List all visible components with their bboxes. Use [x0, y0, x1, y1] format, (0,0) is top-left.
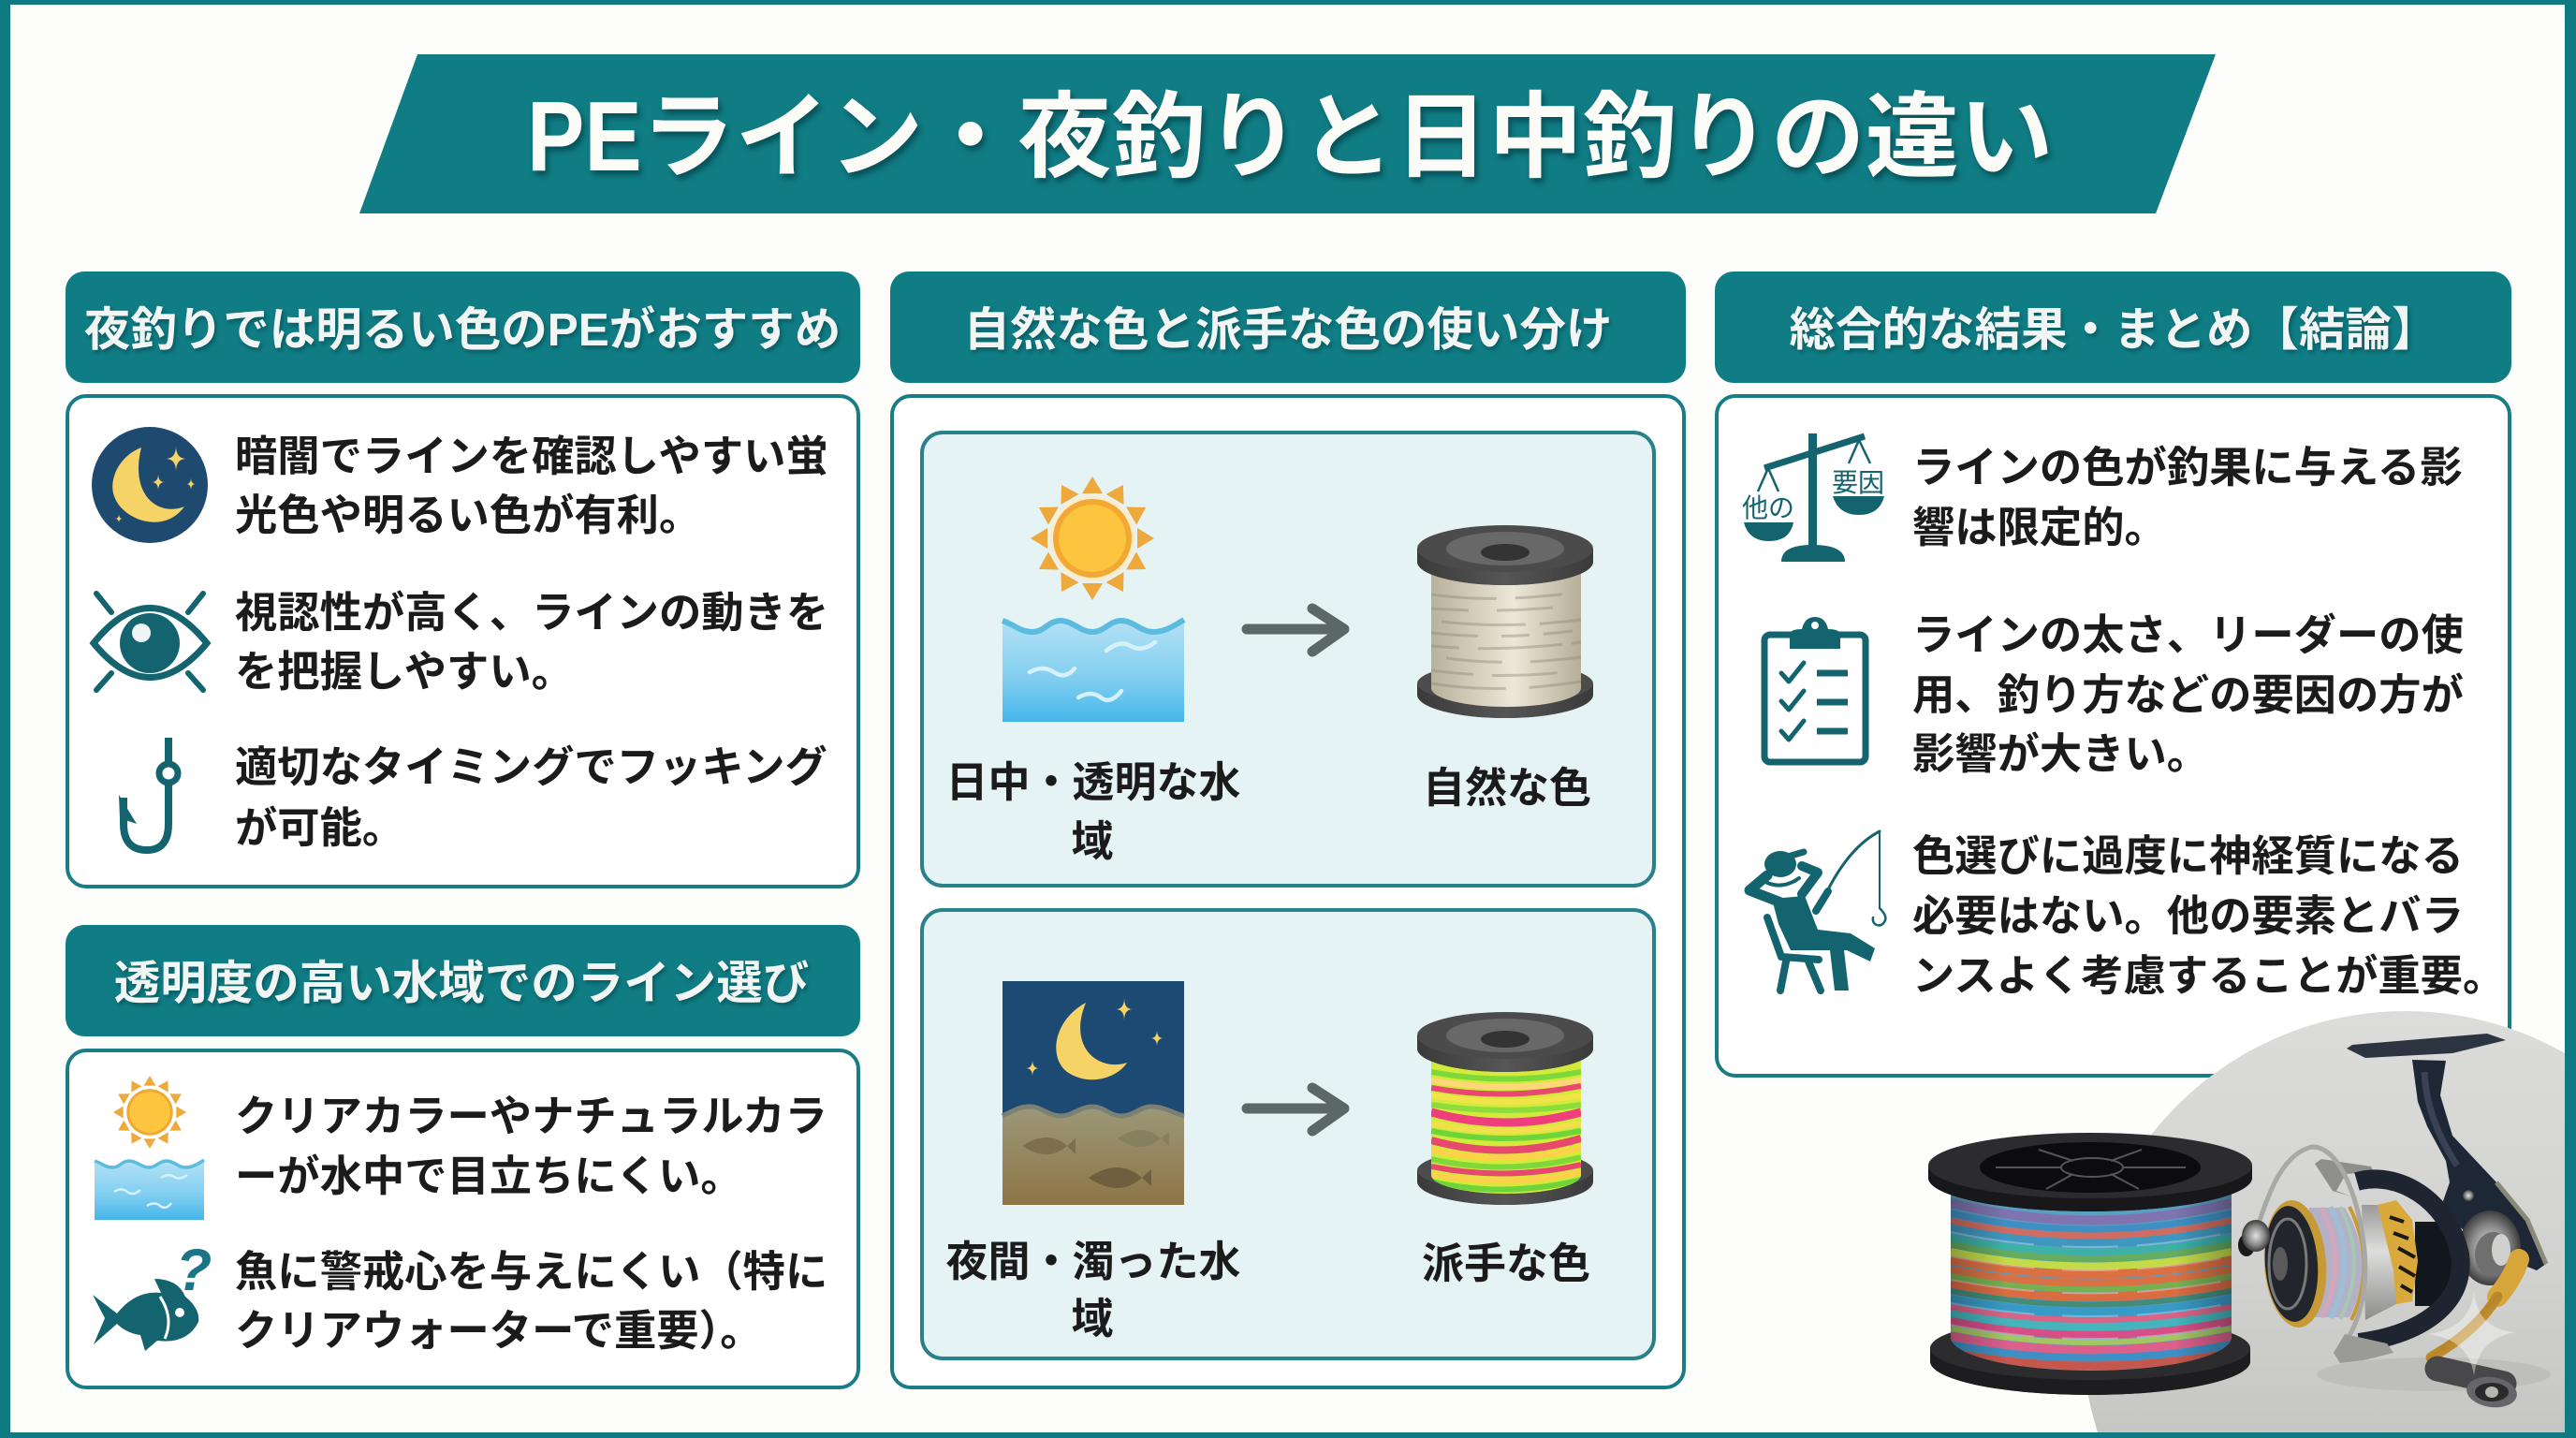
- header text: 夜釣りでは明るい色のPEがおすすめ: [84, 304, 841, 356]
- text: limited impact: 響は限定的。: [1912, 504, 2167, 551]
- text: visibility: [235, 589, 828, 696]
- text: clear colors: ーが水中で目立ちにくい。: [235, 1152, 743, 1200]
- line spool: [1928, 1133, 2252, 1395]
- text: other factors: ラインの太さ、リーダーの使: [1912, 611, 2464, 659]
- icon: fish with question mark: [93, 1238, 212, 1351]
- label: daytime clear water: 域: [1071, 817, 1114, 865]
- text: other factors: 影響が大きい。: [1912, 730, 2209, 778]
- card: night murky water: [922, 910, 1654, 1358]
- text: dark visibility: 暗闇でラインを確認しやすい蛍: [235, 433, 828, 480]
- icon: eye: [94, 594, 207, 690]
- floor shadow: [2317, 1357, 2551, 1391]
- text: hooking: 適切なタイミングでフッキング: [235, 743, 827, 791]
- icon: night sky and murky water: [1003, 981, 1184, 1205]
- text: clear colors: クリアカラーやナチュラルカラ: [235, 1093, 827, 1140]
- title text: PE: [527, 81, 642, 192]
- label: night murky water: 夜間・濁った水: [945, 1238, 1241, 1285]
- label: daytime clear water: 日中・透明な水: [945, 758, 1241, 806]
- icon: balance scale: 他の: [1742, 493, 1794, 522]
- header text: 総合的な結果・まとめ【結論】: [1790, 304, 2437, 356]
- panel: night fishing benefits: [67, 396, 858, 887]
- icon: balance scale: [1742, 433, 1884, 562]
- icon: balance scale: 要因: [1832, 468, 1884, 497]
- title text: ライン・夜釣りと日中釣りの違い: [641, 85, 2054, 190]
- card: daytime clear water: [922, 433, 1654, 886]
- header text: 透明度の高い水域でのライン選び: [114, 958, 809, 1009]
- spinning reel: [2238, 1034, 2546, 1411]
- panel: summary conclusion: [1717, 396, 2510, 1076]
- icon: fish with question mark: ?: [176, 1238, 212, 1303]
- text: no need to worry: 色選びに過度に神経質になる: [1912, 832, 2464, 880]
- text: fish wariness: クリアウォーターで重要）。: [235, 1307, 762, 1355]
- icon: sun and water: [95, 1076, 204, 1220]
- panel: natural vs flashy header: [890, 271, 1686, 383]
- panel: clear water header: [66, 925, 860, 1036]
- text: dark visibility: 光色や明るい色が有利。: [235, 492, 701, 539]
- text: dark visibility: [235, 433, 828, 539]
- text: no need to worry: [1912, 832, 2505, 1000]
- text: other factors: 用、釣り方などの要因の方が: [1912, 671, 2464, 719]
- text: fish wariness: [235, 1248, 827, 1355]
- label: flashy color: 派手な色: [1422, 1240, 1590, 1287]
- arrow: [1247, 609, 1344, 652]
- icon: sun: [1031, 477, 1154, 600]
- text: no need to worry: 必要はない。他の要素とバラ: [1912, 892, 2464, 940]
- panel: night fishing header: [66, 271, 860, 383]
- text: fish wariness: 魚に警戒心を与えにくい（特に: [235, 1248, 827, 1296]
- header text: 自然な色と派手な色の使い分け: [964, 304, 1612, 356]
- text: visibility: を把握しやすい。: [235, 648, 574, 696]
- text: limited impact: [1912, 444, 2463, 551]
- icon: clipboard checklist: [1764, 617, 1866, 762]
- grey backdrop circle: [2083, 1011, 2565, 1432]
- text: clear colors: [235, 1093, 827, 1200]
- icon: flashy color spool: [1417, 1012, 1593, 1205]
- icon: relaxed angler: [1749, 831, 1885, 990]
- text: no need to worry: ンスよく考慮することが重要。: [1912, 952, 2505, 1000]
- title banner: [359, 54, 2216, 213]
- panel: natural vs flashy comparison: [892, 396, 1684, 1387]
- label: night murky water: 域: [1071, 1295, 1114, 1343]
- arrow: [1247, 1088, 1344, 1131]
- text: visibility: 視認性が高く、ラインの動きを: [235, 589, 828, 637]
- label: natural color: 自然な色: [1423, 764, 1591, 812]
- label: daytime clear water: [945, 758, 1241, 865]
- panel: clear water line choice: [67, 1050, 858, 1387]
- text: hooking: [235, 743, 827, 852]
- icon: clear water: [1003, 620, 1184, 722]
- photo: multicolor PE line spool and spinning reel: [1928, 1011, 2565, 1432]
- text: limited impact: ラインの色が釣果に与える影: [1912, 444, 2463, 492]
- panel: summary header: [1715, 271, 2511, 383]
- text: other factors: [1912, 611, 2464, 778]
- icon: natural color spool: [1417, 525, 1593, 718]
- label: night murky water: [945, 1238, 1241, 1343]
- icon: hook: [119, 738, 178, 850]
- icon: moon: [92, 427, 208, 543]
- text: hooking: が可能。: [235, 804, 404, 852]
